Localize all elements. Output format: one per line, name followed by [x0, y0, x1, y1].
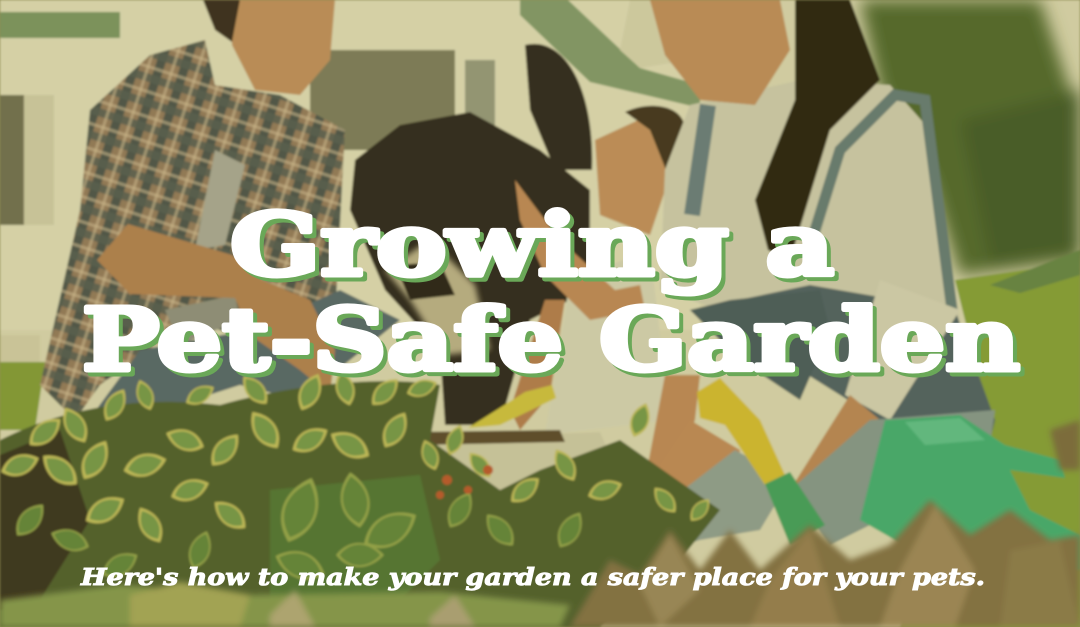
jeans — [600, 450, 790, 560]
title face: Growing a — [230, 195, 834, 296]
red berries — [436, 465, 493, 499]
jeans — [85, 290, 400, 430]
forearm — [645, 375, 700, 480]
right strap — [812, 95, 952, 310]
arm — [97, 224, 335, 395]
watering can: green body — [860, 415, 1080, 570]
subtitle: Here's how to make your garden a safer place for your pets. — [80, 564, 985, 591]
planter — [405, 385, 610, 540]
background: tree — [860, 0, 1080, 275]
undershirt — [195, 150, 245, 250]
face — [650, 0, 790, 105]
woman — [600, 0, 995, 560]
watering can: yellow spout — [697, 378, 825, 545]
hair — [755, 0, 880, 260]
title shadow: Pet-Safe Garden — [86, 294, 1024, 395]
title shadow — [86, 199, 1024, 395]
dog — [350, 44, 592, 425]
girl — [510, 106, 685, 435]
sleeve — [845, 280, 960, 420]
foreground: shrubs — [0, 368, 720, 627]
shirt — [40, 40, 345, 420]
head — [232, 0, 335, 95]
title face — [82, 195, 1020, 391]
foreground: blurred succulents — [0, 420, 1080, 627]
top — [660, 80, 960, 420]
left strap — [692, 105, 708, 215]
background: lawn — [0, 250, 1080, 627]
title face: Pet-Safe Garden — [82, 290, 1020, 391]
title shadow: Growing a — [234, 199, 838, 300]
leaves — [0, 368, 714, 586]
title — [82, 195, 1024, 395]
man — [40, 0, 400, 430]
overalls — [690, 285, 995, 440]
